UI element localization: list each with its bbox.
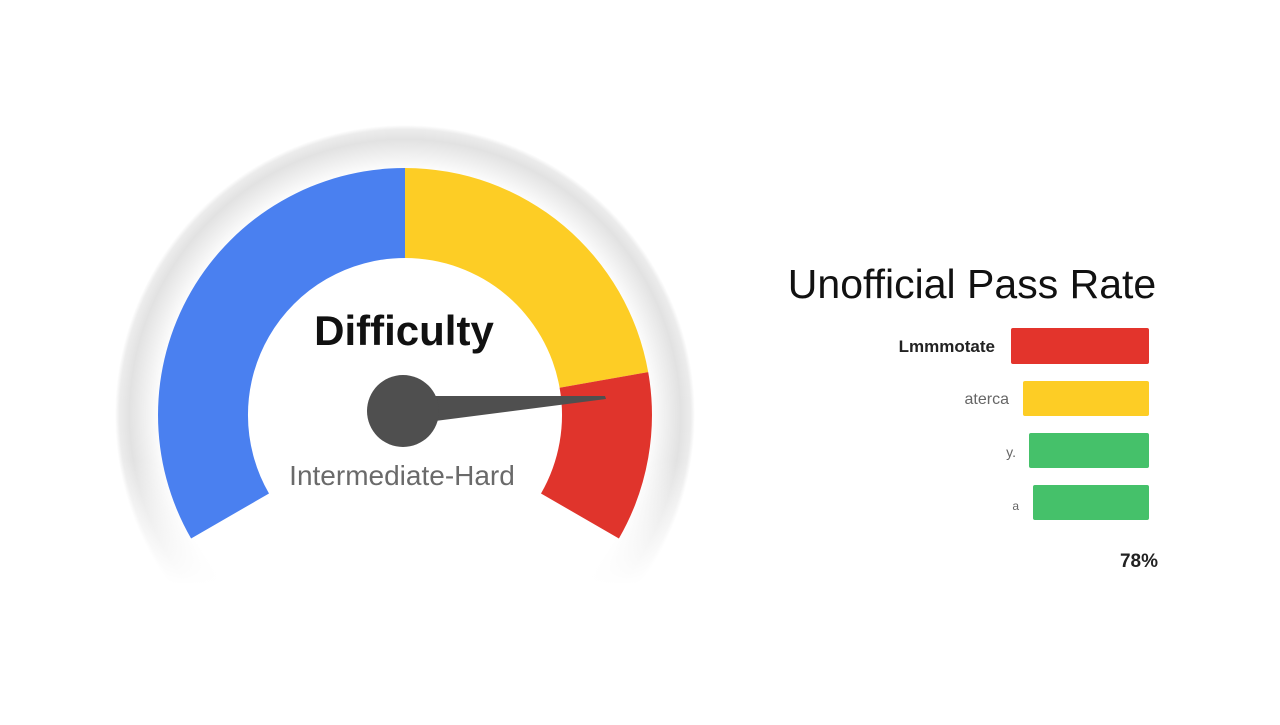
gauge outer shadow ring [100,125,710,720]
bar row 3: y. [1006,444,1016,460]
bar row 3 [1006,433,1149,468]
bar row 1: Lmmmotate [899,337,995,356]
panel: unofficial pass rate [788,261,1158,572]
bar row 2 [965,381,1149,416]
bar row 1 [899,328,1149,364]
needle [367,375,606,447]
gauge: difficulty [100,125,710,720]
gauge segment: yellow [405,168,648,388]
gauge value label: Intermediate-Hard [289,460,515,491]
pass rate title: Unofficial Pass Rate [788,261,1156,307]
pass rate value: 78% [1120,551,1158,572]
gauge heading: Difficulty [314,307,494,354]
gauge segment: blue [158,168,405,538]
bar row 4 [1012,485,1149,520]
gauge segment: red [541,372,652,538]
bar row 2: aterca [965,391,1009,408]
bar row 4: a [1012,499,1019,513]
